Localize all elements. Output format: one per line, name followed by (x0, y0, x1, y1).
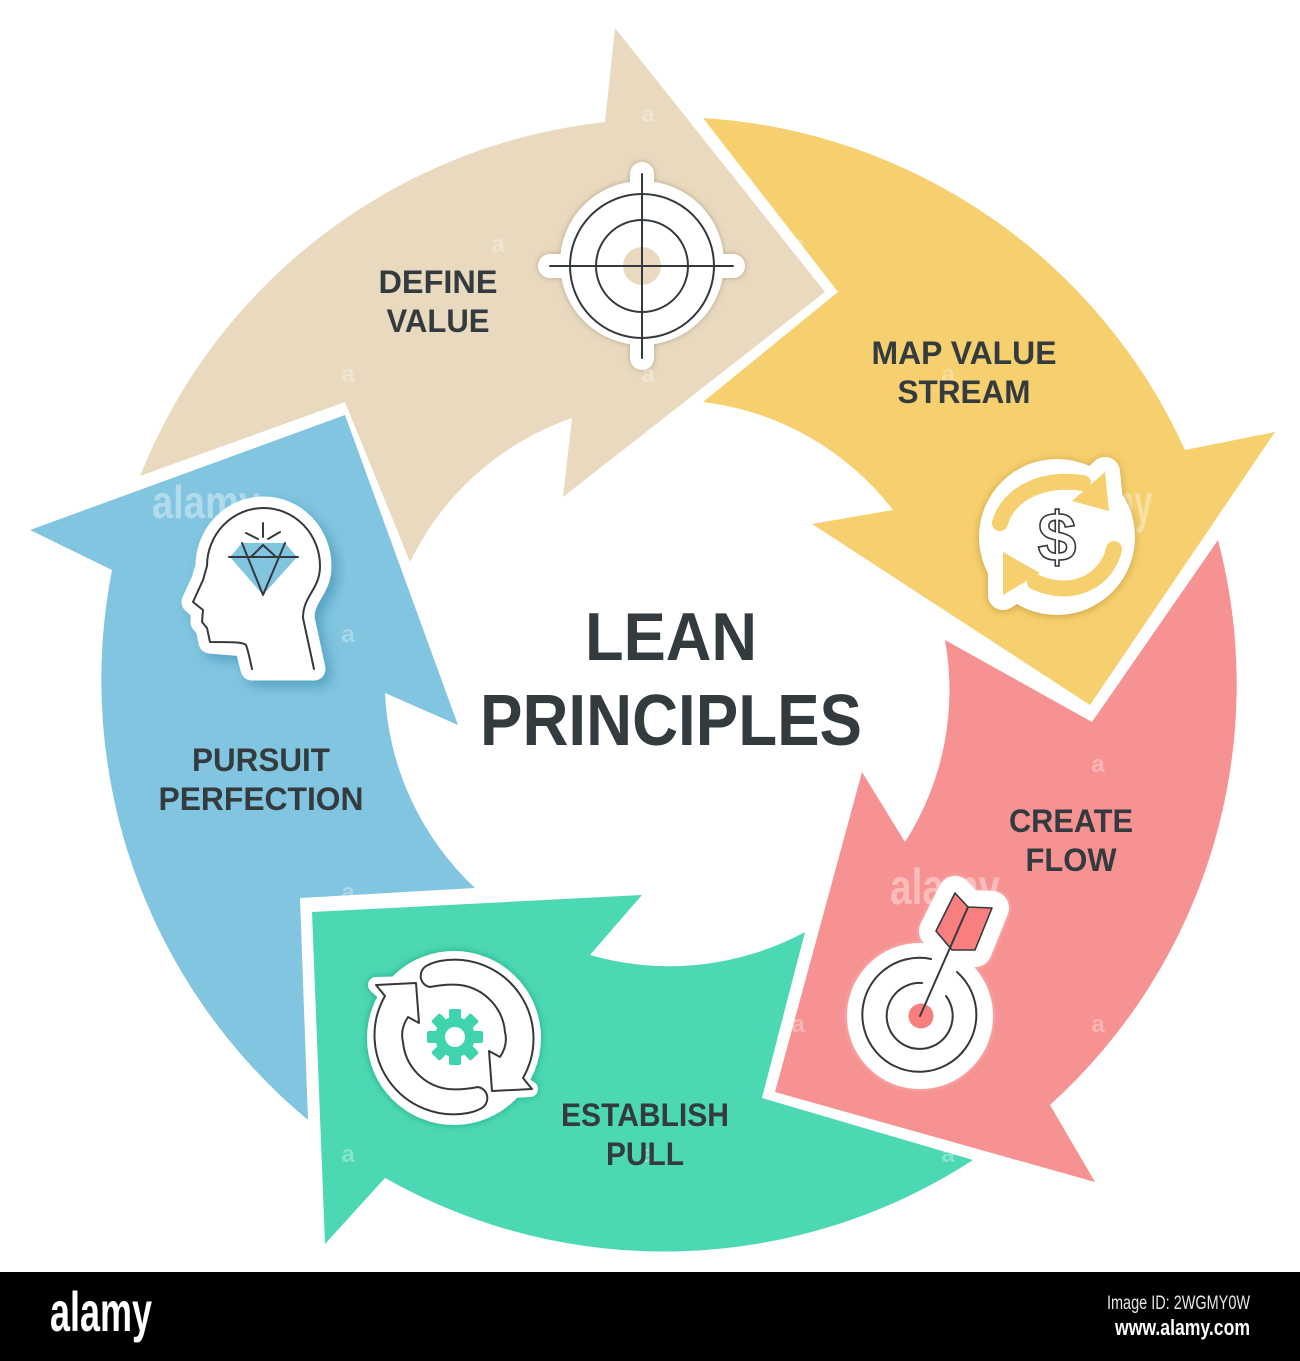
watermark: alamy bottom: alamy (890, 859, 1000, 915)
watermark pattern: a (941, 361, 955, 388)
label: pursuit perfection: PURSUIT (192, 742, 330, 778)
arrow: map value stream (703, 118, 1275, 705)
watermark pattern: a (791, 1011, 805, 1038)
footer image id: Image ID: 2WGMY0W (1107, 1293, 1250, 1314)
watermark: alamy left: alamy (152, 476, 260, 528)
icon: dollar cycle: $ (1038, 498, 1076, 576)
footer url: www.alamy.com (1114, 1315, 1250, 1340)
label: map value stream: MAP VALUE (872, 335, 1056, 371)
label: map value stream: STREAM (898, 374, 1030, 410)
watermark pattern: a (641, 1141, 655, 1168)
arrow: pursuit perfection (30, 415, 475, 1120)
footer bar (0, 1272, 1300, 1361)
footer logo: alamy (50, 1280, 152, 1343)
label: define value: VALUE (386, 303, 490, 339)
title: PRINCIPLES (480, 681, 862, 761)
label: create flow: CREATE (1009, 803, 1133, 839)
title: LEAN (585, 599, 757, 675)
arrow: create flow (775, 540, 1237, 1182)
icon: gear cycle (367, 951, 541, 1125)
label: establish pull: ESTABLISH (561, 1097, 729, 1133)
label: establish pull: PULL (606, 1136, 684, 1172)
watermark pattern: a (341, 1141, 355, 1168)
icon: head with diamond (193, 508, 320, 669)
label: pursuit perfection: PERFECTION (158, 781, 364, 817)
watermark pattern: a (1091, 751, 1105, 778)
watermark pattern: a (941, 1141, 955, 1168)
label: define value: DEFINE (378, 264, 498, 300)
watermark pattern: a (1091, 1011, 1105, 1038)
watermark pattern: a (341, 879, 355, 906)
label: create flow: FLOW (1026, 842, 1117, 878)
watermark pattern (341, 101, 1105, 1168)
watermark pattern: a (341, 361, 355, 388)
watermark: alamy right: alamy (1062, 474, 1152, 534)
arrow: define value (140, 28, 825, 562)
watermark pattern: a (641, 101, 655, 128)
icon: dollar cycle (979, 459, 1135, 615)
watermark pattern: a (791, 231, 805, 258)
icon: dart and bullseye (847, 893, 993, 1089)
arrow: establish pull (312, 895, 973, 1251)
watermark pattern: a (341, 621, 355, 648)
watermark pattern: a (641, 361, 655, 388)
icon: crosshair target (538, 162, 745, 370)
watermark pattern: a (491, 231, 505, 258)
